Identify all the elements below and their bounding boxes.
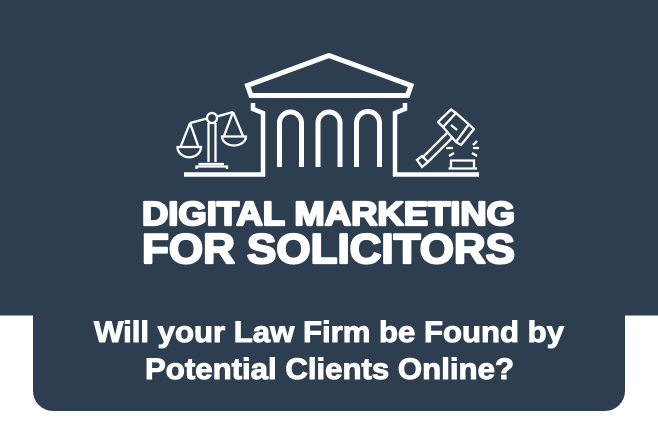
left wall — [184, 103, 263, 174]
subtitle line 2: Potential Clients Online? — [145, 353, 514, 386]
right pan — [222, 112, 246, 146]
column arch 3 — [356, 112, 380, 167]
title line 2: FOR SOLICITORS — [142, 225, 515, 272]
right wall — [395, 103, 479, 174]
sound block — [448, 160, 477, 168]
column arch 2 — [318, 112, 340, 167]
post — [208, 123, 216, 162]
subtitle — [94, 316, 564, 386]
left pan — [178, 123, 201, 157]
impact rays — [446, 141, 479, 156]
subtitle line 1: Will your Law Firm be Found by — [94, 316, 564, 349]
beam — [190, 112, 233, 123]
stand — [196, 164, 227, 169]
handle — [417, 133, 452, 167]
title line 1: DIGITAL MARKETING — [142, 195, 515, 232]
title — [142, 195, 515, 272]
icon: gavel — [417, 110, 479, 168]
icon: scales of justice — [178, 112, 246, 169]
column arch 1 — [280, 112, 302, 167]
icon: courthouse — [184, 56, 479, 174]
pediment — [248, 56, 411, 96]
pivot — [207, 113, 217, 123]
hammer head — [438, 110, 474, 145]
hammer band — [443, 113, 469, 142]
